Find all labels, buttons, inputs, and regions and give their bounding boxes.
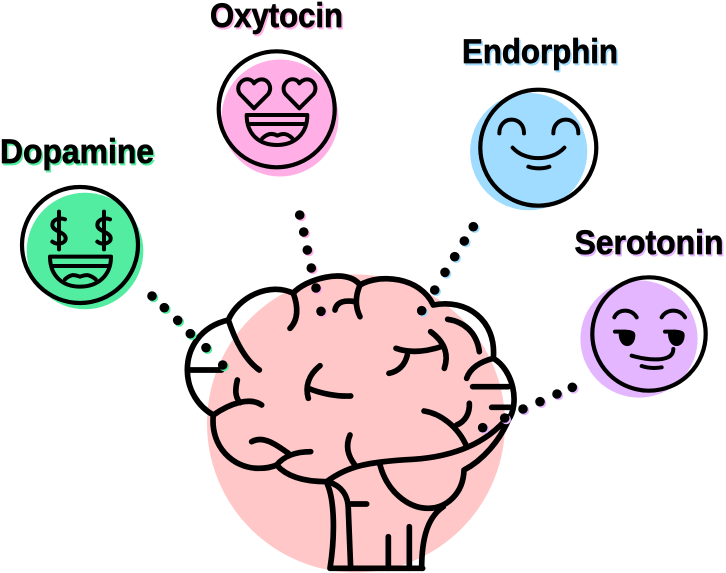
- label: Dopamine: Dopamine: [2, 135, 156, 173]
- label: Endorphin: Endorphin: [462, 33, 618, 71]
- dotted connector: dopamine: [147, 291, 229, 371]
- label: Dopamine: Dopamine: [0, 133, 154, 171]
- dotted connector: serotonin: [478, 382, 579, 434]
- face: oxytocin (heart eyes): [219, 51, 338, 176]
- dotted connector: oxytocin: [295, 210, 327, 318]
- brain illustration: [187, 276, 514, 568]
- brain background circle: [207, 274, 505, 572]
- label: Oxytocin: Oxytocin: [212, 0, 344, 37]
- dotted connector: endorphin: [417, 222, 480, 317]
- face: endorphin (smiling): [470, 90, 596, 210]
- label: Endorphin: Endorphin: [464, 35, 620, 73]
- face: serotonin (smirking): [580, 277, 706, 398]
- face: dopamine (dollar eyes): [22, 187, 143, 309]
